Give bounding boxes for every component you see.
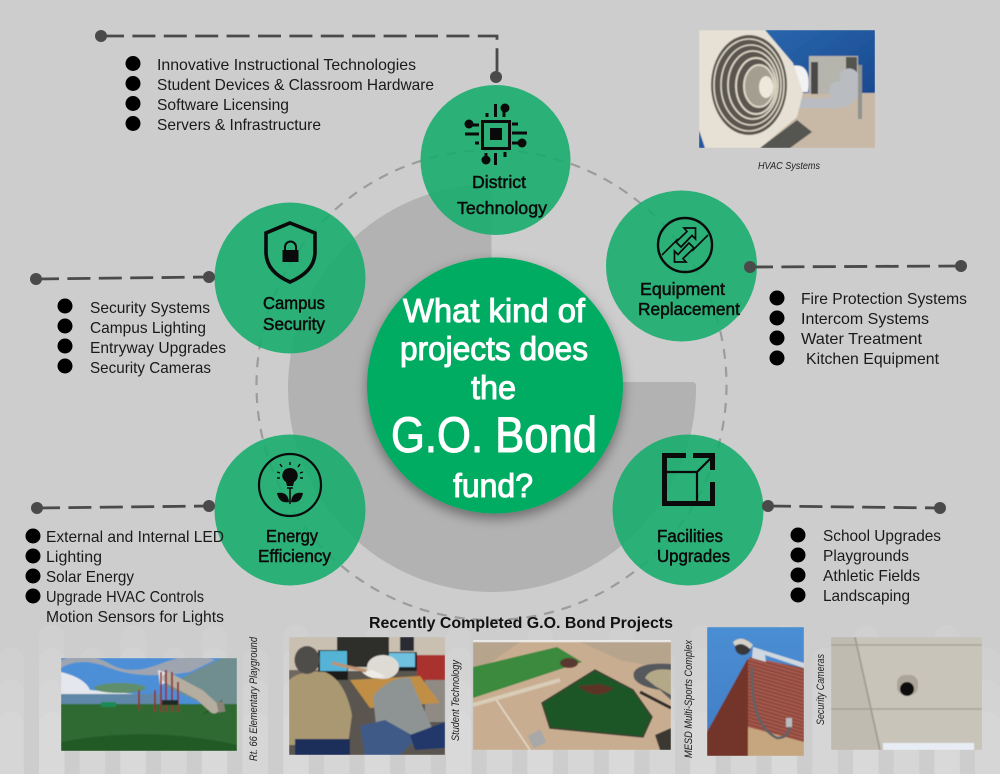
central circle with question: What kind of <box>403 292 586 329</box>
label: energy efficiency: Energy <box>266 526 318 546</box>
icon: shield with padlock <box>266 223 315 282</box>
grey three-quarter circle backdrop <box>288 184 696 592</box>
heading: recently completed projects: Recently Completed G.O. Bond Projects <box>369 615 673 632</box>
photo: HVAC systems <box>699 30 875 148</box>
icon: expanding box <box>664 453 715 504</box>
panel: energy efficiency <box>214 434 366 586</box>
list: campus security items: Entryway Upgrades <box>90 340 226 357</box>
central circle with question: G.O. Bond <box>391 407 597 463</box>
photo: student technology <box>289 637 445 755</box>
panel: equipment replacement <box>606 190 757 342</box>
caption: exterior security camera: Security Cameras <box>815 654 827 725</box>
label: equipment replacement <box>638 279 740 319</box>
label: district technology: Technology <box>457 198 547 218</box>
list: energy efficiency items: Solar Energy <box>46 569 134 586</box>
label: equipment replacement: Replacement <box>638 299 740 319</box>
list: facilities upgrades items: Athletic Fields <box>823 568 920 585</box>
panel: campus security <box>214 202 366 354</box>
list: equipment replacement items: Kitchen Equipment <box>806 351 940 368</box>
caption: HVAC systems: HVAC Systems <box>758 161 820 172</box>
list: energy efficiency items: External and Internal LED <box>46 529 224 546</box>
list: energy efficiency items: Upgrade HVAC Controls <box>46 589 204 606</box>
list: district technology items: Software Licensing <box>157 97 289 114</box>
leader line: energy efficiency <box>31 500 215 514</box>
list: facilities upgrades items: School Upgrades <box>823 528 941 545</box>
list: energy efficiency items <box>26 528 224 626</box>
list: energy efficiency items: Motion Sensors for Lights <box>46 609 224 626</box>
central circle with question: projects does <box>400 330 588 367</box>
caption: multi-sports complex: MESD Multi-Sports Complex <box>683 640 695 758</box>
central circle with question: the <box>471 369 516 406</box>
caption: playground: Rt. 66 Elementary Playground <box>248 636 260 761</box>
label: campus security: Security <box>263 314 325 334</box>
label: campus security <box>263 293 325 334</box>
photo: exterior security camera <box>707 627 804 756</box>
leader line: equipment replacement <box>744 260 967 273</box>
list: district technology items <box>126 56 434 134</box>
list: facilities upgrades items: Playgrounds <box>823 548 909 565</box>
list: equipment replacement items: Fire Protection Systems <box>801 291 967 308</box>
dashed orbit ring <box>256 150 726 620</box>
label: district technology: District <box>472 172 526 192</box>
list: campus security items: Campus Lighting <box>90 320 206 337</box>
list: campus security items <box>58 298 226 377</box>
label: energy efficiency: Efficiency <box>258 546 331 566</box>
list: energy efficiency items: Lighting <box>46 549 102 566</box>
list: campus security items: Security Cameras <box>90 360 211 377</box>
icon: microchip <box>464 104 527 165</box>
list: equipment replacement items: Intercom Systems <box>801 311 929 328</box>
icon: light bulb plant <box>259 454 321 516</box>
photo: multi-sports complex <box>473 640 671 750</box>
icon: crossed double arrows <box>658 218 712 272</box>
leader line: facilities upgrades <box>762 500 946 514</box>
list: district technology items: Student Devices & Classroom Hardware <box>157 77 434 94</box>
label: equipment replacement: Equipment <box>640 279 725 299</box>
list: district technology items: Servers & Infrastructure <box>157 117 321 134</box>
photo: ceiling security camera <box>831 637 985 750</box>
panel: facilities upgrades <box>612 434 764 586</box>
caption: student technology: Student Technology <box>450 659 462 741</box>
central circle with question: fund? <box>453 467 533 504</box>
label: facilities upgrades: Facilities <box>657 526 723 546</box>
label: facilities upgrades: Upgrades <box>657 546 730 566</box>
panel: district technology <box>420 85 570 235</box>
label: campus security: Campus <box>263 293 325 313</box>
central circle with question <box>367 258 623 514</box>
leader line: district technology <box>95 30 502 83</box>
label: facilities upgrades <box>657 526 730 566</box>
label: energy efficiency <box>258 526 331 566</box>
list: equipment replacement items: Water Treatment <box>801 331 923 348</box>
label: district technology <box>457 172 547 218</box>
list: facilities upgrades items <box>790 528 941 605</box>
list: campus security items: Security Systems <box>90 300 210 317</box>
list: facilities upgrades items: Landscaping <box>823 588 910 605</box>
photo: playground <box>61 657 237 751</box>
list: district technology items: Innovative Instructional Technologies <box>157 57 416 74</box>
leader line: campus security <box>30 271 215 285</box>
list: equipment replacement items <box>770 290 967 368</box>
